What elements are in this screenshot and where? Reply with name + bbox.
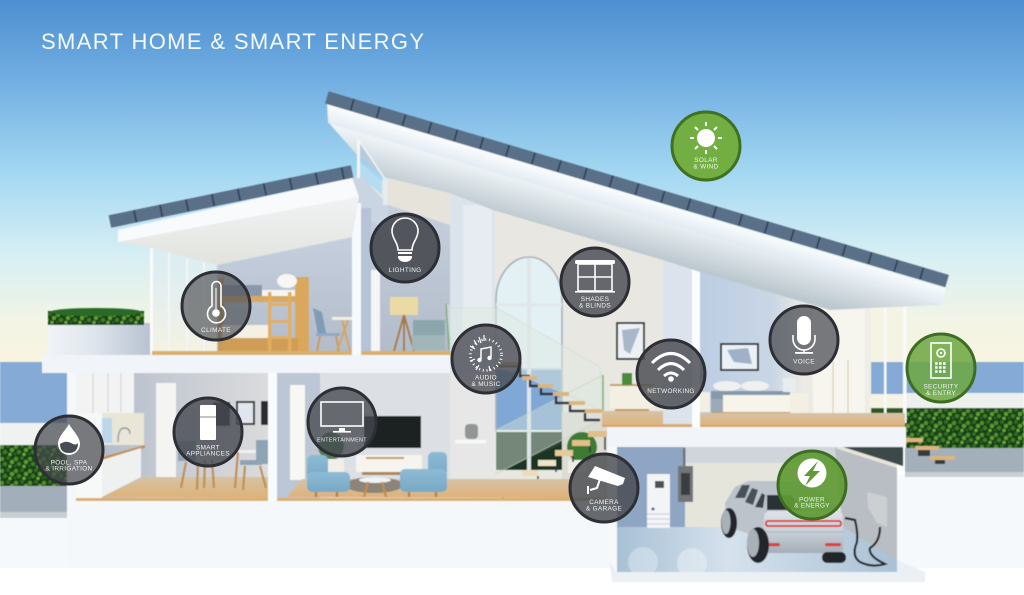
garage slab edge xyxy=(610,560,925,582)
badge: audio and music: AUDIO xyxy=(475,374,497,382)
icon: light bulb xyxy=(392,218,418,262)
badge: security and entry: & ENTRY xyxy=(926,390,956,397)
stairwell window view xyxy=(495,257,610,498)
plant xyxy=(318,432,344,472)
badge: security and entry: SECURITY xyxy=(923,384,959,390)
wall pictures xyxy=(213,401,268,426)
icon: refrigerator xyxy=(200,405,216,440)
badge: lighting: LIGHTING xyxy=(389,267,421,274)
foundation and ground xyxy=(42,355,612,567)
floor xyxy=(102,477,268,498)
glass stair railings xyxy=(445,302,603,477)
upper floor wood xyxy=(602,411,905,427)
badge: lighting xyxy=(371,214,439,282)
television xyxy=(364,416,421,448)
ground plane xyxy=(0,475,1024,568)
bunk bed xyxy=(218,274,309,352)
badge: camera and garage: CAMERA xyxy=(589,499,619,506)
badge: pool, spa and irrigation: POOL, SPA xyxy=(51,460,88,466)
rug and coffee table xyxy=(345,477,403,497)
smart speaker on shelf xyxy=(455,424,486,444)
icon: security camera xyxy=(588,466,625,494)
badge: shades and blinds: SHADES xyxy=(581,296,609,303)
icon: music note with sound rays xyxy=(470,335,502,371)
landscape: left garden xyxy=(0,362,68,518)
upper left floor strip xyxy=(152,351,352,355)
ground floor left room: kitchen and dining xyxy=(76,373,268,501)
garage xyxy=(610,447,925,582)
sky background xyxy=(0,0,1024,363)
desk and chair xyxy=(313,308,352,351)
icon: television xyxy=(321,402,363,433)
garage floor xyxy=(617,527,897,572)
badge: networking xyxy=(637,340,705,408)
slab over garage xyxy=(607,427,906,448)
badge: voice: VOICE xyxy=(793,358,815,366)
bedroom picture xyxy=(720,343,759,371)
title: SMART HOME & SMART ENERGY xyxy=(41,29,424,54)
electric car xyxy=(721,481,846,563)
badge: camera and garage: & GARAGE xyxy=(586,506,622,512)
electrical panel xyxy=(678,448,693,502)
icon: thermometer xyxy=(208,282,225,323)
left side of right wing wall decor xyxy=(610,316,686,412)
badge: voice xyxy=(770,306,838,374)
icon: window shade xyxy=(575,260,615,293)
floor xyxy=(287,479,570,498)
terrace planter and hedge xyxy=(48,308,150,355)
bedroom xyxy=(700,272,906,423)
kitchen upper cabinets xyxy=(76,373,134,413)
badge: climate xyxy=(182,272,250,340)
badge: networking: NETWORKING xyxy=(647,388,695,395)
dining set xyxy=(178,440,268,490)
badge: entertainment: ENTERTAINMENT xyxy=(317,438,367,444)
armchair right xyxy=(400,452,447,497)
stairs xyxy=(487,362,608,498)
badge: shades and blinds: & BLINDS xyxy=(579,302,611,310)
badge: solar and wind: SOLAR xyxy=(694,157,718,164)
badge: security and entry xyxy=(907,334,975,402)
garage window xyxy=(843,447,903,466)
icon: sun xyxy=(690,122,722,154)
badge: climate: CLIMATE xyxy=(201,327,231,334)
icon: microphone xyxy=(793,316,815,354)
icon: lightning bolt xyxy=(798,458,826,488)
badge: power and energy xyxy=(778,451,846,519)
badge: power and energy: POWER xyxy=(799,496,825,504)
ground floor central column xyxy=(268,373,277,501)
badge: entertainment xyxy=(308,388,376,456)
badge: pool, spa and irrigation: & IRRIGATION xyxy=(45,466,93,472)
icon: wifi xyxy=(652,354,690,382)
badge: smart appliances xyxy=(174,398,242,466)
badge: camera and garage xyxy=(570,454,638,522)
media console xyxy=(356,455,422,475)
door xyxy=(290,385,305,480)
roof: main wing xyxy=(327,98,947,310)
roof: left wing xyxy=(110,172,359,265)
icon: entry keypad xyxy=(931,343,951,378)
bed xyxy=(700,378,808,415)
badge: solar and wind xyxy=(672,112,740,180)
clerestory window xyxy=(358,140,387,205)
badge: audio and music xyxy=(452,325,520,393)
armchair left xyxy=(307,455,350,497)
badge: smart appliances: SMART xyxy=(196,444,220,452)
icon: water drop xyxy=(58,424,80,455)
badge: shades and blinds xyxy=(561,248,629,316)
lamp and sofa room xyxy=(361,297,451,355)
garage left wall xyxy=(607,447,617,562)
bedroom window xyxy=(870,303,906,423)
ground floor living room xyxy=(277,373,610,501)
badge: power and energy: & ENERGY xyxy=(794,502,830,510)
wall EV charger and cable xyxy=(845,492,887,566)
home battery xyxy=(647,474,670,528)
badge: audio and music: & MUSIC xyxy=(471,381,501,388)
badge: pool, spa and irrigation xyxy=(35,416,103,484)
robot vacuum reflections xyxy=(628,547,707,578)
door xyxy=(156,383,176,479)
plant below stairs xyxy=(567,432,597,473)
interior column xyxy=(663,242,700,427)
kitchen backsplash and counter xyxy=(102,413,145,497)
badge: smart appliances: APPLIANCES xyxy=(186,450,230,458)
center white column xyxy=(352,175,388,355)
upper left room xyxy=(150,237,352,353)
landscape: right garden and sea xyxy=(905,362,1024,477)
upper right structure: walls xyxy=(361,178,905,498)
badge: solar and wind: & WIND xyxy=(693,164,719,170)
